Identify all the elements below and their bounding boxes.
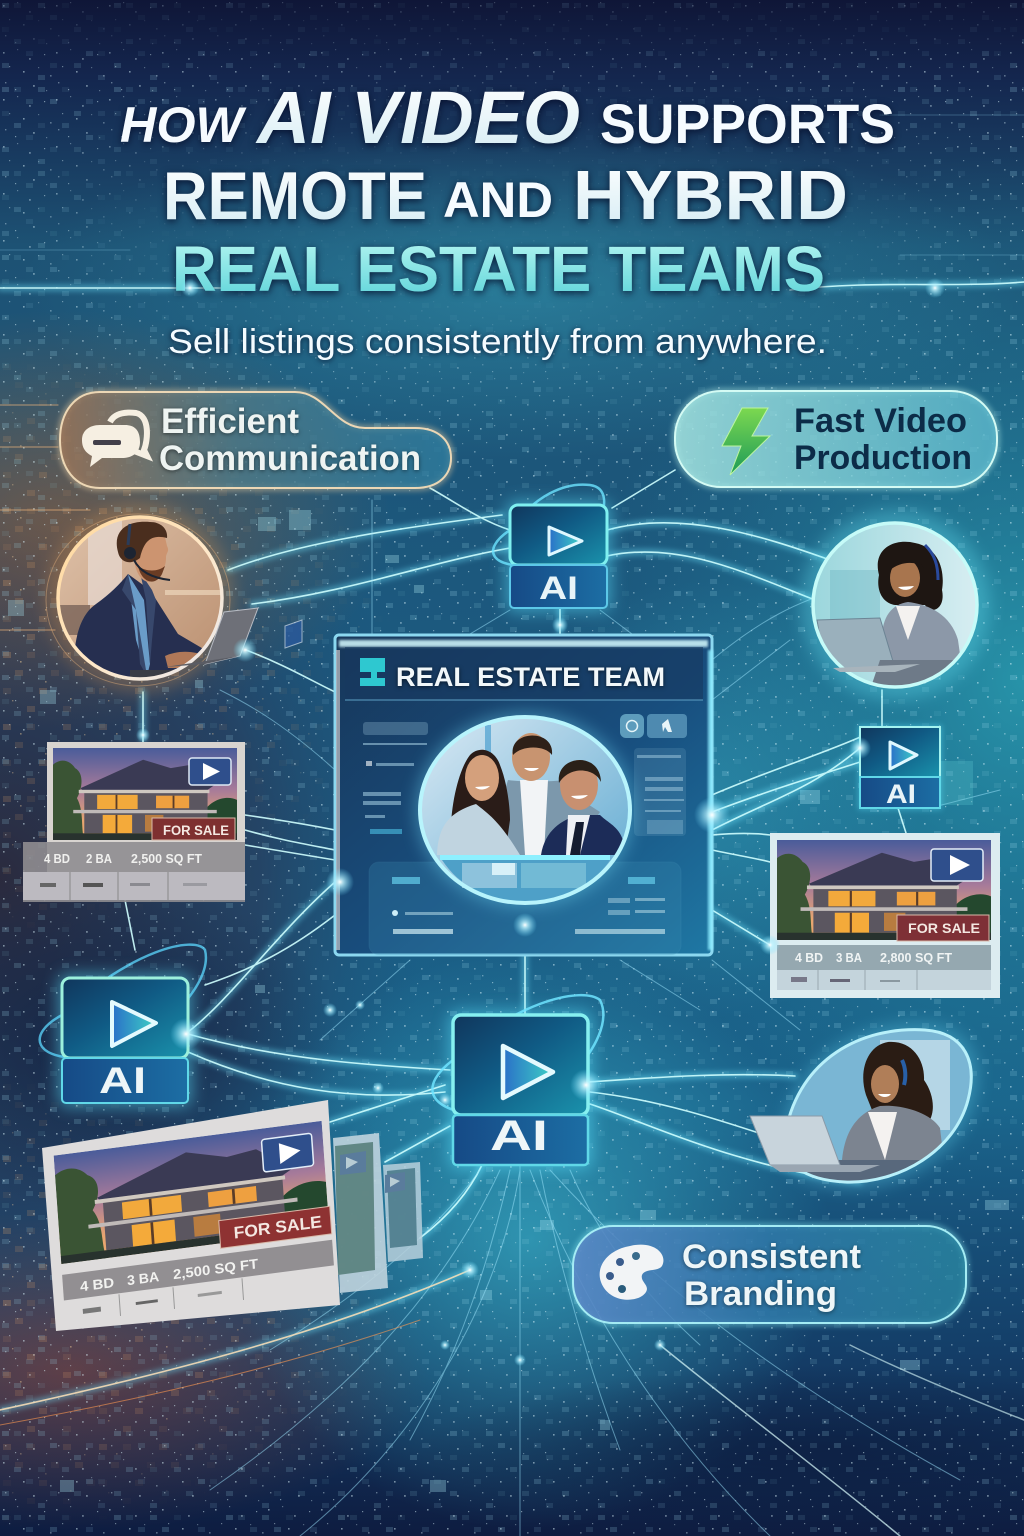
play badge: [261, 1133, 314, 1172]
pill: Fast Video Production: [675, 391, 997, 487]
play badge: [189, 758, 231, 785]
title: SUPPORTS: [600, 92, 895, 155]
pill label: Fast Video: [794, 402, 967, 440]
AI video icon left: [40, 945, 206, 1107]
person: woman with headset: [750, 1020, 980, 1190]
title: AND: [443, 172, 553, 228]
AI video icon right: [858, 725, 973, 810]
team photo: [415, 712, 635, 908]
pill label: Branding: [684, 1275, 837, 1313]
title: HYBRID: [573, 156, 848, 234]
info strip: [23, 842, 245, 902]
AI video icon center: AI: [490, 1112, 548, 1160]
AI video icon top: AI: [539, 570, 578, 606]
title: AI VIDEO: [255, 76, 580, 159]
listing card left: [23, 742, 245, 902]
icon: chat bubbles: [82, 413, 147, 467]
for sale tag: FOR SALE: [233, 1212, 322, 1243]
info strip: 2,500 SQ FT: [173, 1255, 259, 1282]
bottom ui tray: [369, 862, 681, 955]
laptop: [750, 1116, 840, 1165]
right ui bars: [634, 748, 686, 836]
for sale tag: FOR SALE: [908, 920, 980, 936]
person: woman with laptop: [800, 510, 990, 700]
info strip: 3 BA: [836, 951, 862, 965]
subtitle: Sell listings consistently from anywhere.: [168, 323, 827, 361]
pill label: Communication: [159, 439, 421, 478]
AI video icon right: AI: [886, 779, 916, 809]
for sale tag: [152, 818, 235, 840]
icon: palette: [600, 1245, 663, 1300]
title: [120, 76, 895, 305]
for sale tag: [897, 915, 989, 941]
pill label: Consistent: [682, 1238, 861, 1276]
icon: lightning bolt: [722, 408, 770, 475]
info strip: [62, 1240, 336, 1323]
info strip: 4 BD: [44, 852, 70, 866]
info strip: 4 BD: [795, 951, 823, 965]
for sale tag: FOR SALE: [163, 822, 229, 838]
light flares: [136, 278, 945, 1366]
listing card right: [770, 833, 1000, 998]
info strip: 4 BD: [80, 1274, 115, 1294]
toggle buttons: [620, 714, 687, 738]
laptop: [205, 608, 258, 664]
AI video icon center: [432, 995, 603, 1169]
person: man with headset: [46, 504, 302, 692]
info strip: 2,800 SQ FT: [880, 951, 952, 965]
left ui bars: [363, 722, 428, 834]
pill: Consistent Branding: [573, 1226, 966, 1323]
info strip: 3 BA: [127, 1268, 160, 1288]
pill label: Production: [794, 439, 972, 477]
play badge: [931, 849, 983, 881]
for sale tag: [219, 1206, 332, 1248]
title: HOW: [120, 97, 247, 153]
listing card large: [42, 1100, 340, 1331]
pill label: Efficient: [161, 402, 299, 441]
panel heading: REAL ESTATE TEAM: [396, 662, 665, 692]
title: REAL ESTATE TEAMS: [172, 233, 825, 305]
AI video icon top: [493, 485, 611, 612]
title: REMOTE: [163, 158, 427, 234]
logo: [360, 658, 385, 686]
AI video icon left: AI: [99, 1060, 146, 1101]
panel: real estate team: [335, 635, 713, 955]
info strip: 2,500 SQ FT: [131, 852, 202, 866]
info strip: 2 BA: [86, 852, 112, 866]
info strip: [777, 945, 991, 990]
pill: Efficient Communication: [60, 392, 451, 488]
back listing cards: [333, 1133, 423, 1293]
